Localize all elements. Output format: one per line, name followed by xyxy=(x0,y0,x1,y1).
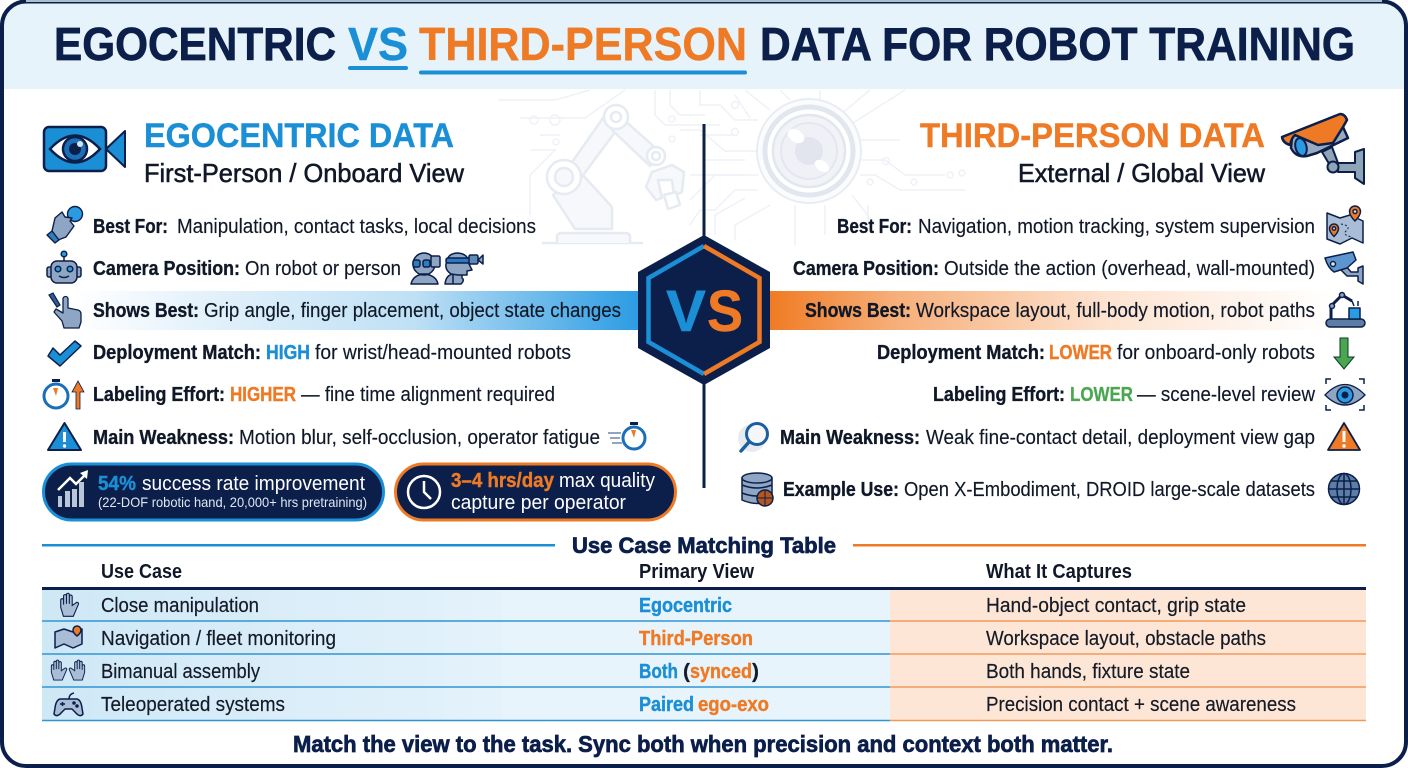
callout: success rate: 54% xyxy=(98,473,136,495)
callout: capture limit xyxy=(396,464,676,520)
table column headers: Use Case xyxy=(101,561,182,583)
row: camera position: Camera Position: xyxy=(93,258,240,280)
table row: teleoperated systems: ego-exo xyxy=(698,694,769,716)
callout: success rate: (22-DOF robotic hand, 20,000+ hrs pretraining) xyxy=(98,494,367,510)
icon: hand xyxy=(61,593,78,616)
table row: bimanual assembly xyxy=(51,660,1190,683)
icon: check mark xyxy=(48,341,81,366)
table row: bimanual assembly: Both xyxy=(639,661,678,683)
subheading: external view: External / Global View xyxy=(1018,158,1265,188)
table row: close manipulation xyxy=(61,593,1246,617)
table row: bimanual assembly: Bimanual assembly xyxy=(101,661,260,683)
VS hexagon badge: V xyxy=(666,279,706,344)
row: labeling effort: Labeling Effort: xyxy=(93,384,225,406)
table row: bimanual assembly: synced xyxy=(690,661,752,683)
row: labeling effort: — scene-level review xyxy=(1137,384,1316,406)
icon: globe xyxy=(1328,474,1360,504)
row: best for: Best For: xyxy=(837,216,912,238)
title: VS xyxy=(348,18,408,70)
row: labeling effort: Labeling Effort: xyxy=(933,384,1065,406)
row: main weakness xyxy=(48,422,645,450)
panel: egocentric header xyxy=(44,117,464,188)
row: shows best xyxy=(805,292,1365,327)
panel: third-person attributes xyxy=(738,206,1365,506)
title: THIRD-PERSON xyxy=(419,18,747,70)
row: main weakness: Motion blur, self-occlusion, operator fatigue xyxy=(239,427,600,449)
row: best for: Manipulation, contact tasks, local decisions xyxy=(177,216,536,238)
table row: teleoperated systems: Paired xyxy=(639,694,694,716)
panel: use case matching table xyxy=(42,533,1366,721)
row: example use: Example Use: xyxy=(783,479,899,501)
table row: navigation: Navigation / fleet monitoring xyxy=(101,628,336,650)
background: robot arm watermark xyxy=(498,90,750,243)
table row: close manipulation: Egocentric xyxy=(639,595,732,617)
row: deployment match xyxy=(48,341,571,366)
panel: third-person header xyxy=(920,114,1364,188)
row: best for xyxy=(47,206,536,243)
VS hexagon badge xyxy=(638,235,770,385)
table column headers xyxy=(101,561,1132,583)
center divider xyxy=(702,124,706,488)
icon: two hands xyxy=(51,660,85,680)
icon: robot head xyxy=(47,251,81,283)
row: deployment match: Deployment Match: xyxy=(877,342,1045,364)
icon: small wall camera xyxy=(1325,252,1363,284)
icon: down arrow xyxy=(1334,338,1354,369)
icon: game controller xyxy=(54,693,83,716)
callout: success rate: success rate improvement xyxy=(142,473,365,495)
row: main weakness xyxy=(738,423,1360,452)
background: camera lens watermark xyxy=(680,90,965,245)
row: deployment match xyxy=(877,338,1354,369)
row: labeling effort xyxy=(933,379,1365,410)
heading: egocentric data: EGOCENTRIC DATA xyxy=(144,117,454,155)
subheading: first-person view: First-Person / Onboard View xyxy=(144,158,464,188)
icon: head-mounted cameras xyxy=(411,253,483,284)
table row: bimanual assembly: ) xyxy=(752,661,759,683)
callout: capture limit: 3–4 hrs/day xyxy=(451,470,555,492)
row: example use xyxy=(742,473,1360,506)
row: shows best: Shows Best: xyxy=(805,300,911,322)
row: best for xyxy=(837,206,1363,244)
heading: third-person data: THIRD-PERSON DATA xyxy=(920,117,1265,155)
row: deployment match: for onboard-only robots xyxy=(1117,342,1315,364)
row: main weakness: Main Weakness: xyxy=(780,427,920,449)
table row: teleoperated systems: Teleoperated systems xyxy=(101,694,285,716)
table row: close manipulation: Hand-object contact, grip state xyxy=(986,595,1246,617)
title xyxy=(54,18,1355,74)
row: shows best xyxy=(49,293,621,328)
row: shows best: Workspace layout, full-body motion, robot paths xyxy=(916,300,1315,322)
row: shows best: Shows Best: xyxy=(93,300,199,322)
table row: bimanual assembly: Both hands, fixture state xyxy=(986,661,1190,683)
callout: capture limit: capture per operator xyxy=(451,492,626,514)
row: best for: Navigation, motion tracking, system supervision xyxy=(918,216,1315,238)
table row: navigation: Third-Person xyxy=(639,628,753,650)
row: main weakness: Main Weakness: xyxy=(93,427,234,449)
highlight bar: right xyxy=(768,291,1334,330)
table row: teleoperated systems xyxy=(54,693,1296,716)
row: camera position: Outside the action (overhead, wall-mounted) xyxy=(944,258,1315,280)
icon: growth chart xyxy=(58,470,88,507)
table column headers: What It Captures xyxy=(986,561,1132,583)
row: deployment match: LOWER xyxy=(1049,342,1112,364)
icon: warning triangle xyxy=(48,423,81,450)
VS hexagon badge: S xyxy=(707,279,743,344)
table row: navigation: Workspace layout, obstacle paths xyxy=(986,628,1266,650)
icon: warning triangle xyxy=(1328,423,1360,450)
table row: bimanual assembly: ( xyxy=(683,661,690,683)
row: example use: Open X-Embodiment, DROID large-scale datasets xyxy=(904,479,1315,501)
icon: clock xyxy=(408,476,440,508)
callout: capture limit: max quality xyxy=(559,470,655,492)
highlight bar: left xyxy=(75,291,641,330)
icon: eye video camera xyxy=(44,127,125,171)
row: deployment match: Deployment Match: xyxy=(93,342,261,364)
row: deployment match: for wrist/head-mounted robots xyxy=(315,342,571,364)
row: camera position: On robot or person xyxy=(245,258,401,280)
table row: teleoperated systems: Precision contact + scene awareness xyxy=(986,694,1296,716)
table row: navigation xyxy=(55,626,1266,650)
icon: stopwatch and up arrow xyxy=(44,379,84,409)
callout: success rate xyxy=(44,464,384,520)
title: EGOCENTRIC xyxy=(54,18,336,70)
title: DATA FOR ROBOT TRAINING xyxy=(760,18,1355,70)
icon: pointing hand xyxy=(49,293,81,328)
icon: eye in scan frame xyxy=(1325,379,1365,410)
row: labeling effort: LOWER xyxy=(1070,384,1133,406)
row: labeling effort: HIGHER xyxy=(230,384,296,406)
icon: blurred stopwatch xyxy=(608,422,645,449)
row: camera position xyxy=(47,251,483,284)
row: camera position xyxy=(793,252,1363,284)
row: shows best: Grip angle, finger placement, object state changes xyxy=(204,300,621,322)
icon: map xyxy=(55,626,82,648)
footer takeaway: Match the view to the task. Sync both when precision and context both matter. xyxy=(293,731,1113,757)
table backgrounds xyxy=(42,587,1366,721)
header band xyxy=(0,0,1408,89)
panel: egocentric attributes xyxy=(44,206,645,450)
table row: close manipulation: Close manipulation xyxy=(101,595,259,617)
icon: conveyor robot xyxy=(1326,292,1365,327)
icon: security camera xyxy=(1282,114,1364,184)
icon: magnifier xyxy=(738,424,768,452)
row: camera position: Camera Position: xyxy=(793,258,939,280)
icon: robot hand xyxy=(47,206,82,243)
icon: map with pin xyxy=(1327,206,1363,244)
row: main weakness: Weak fine-contact detail, deployment view gap xyxy=(926,427,1315,449)
table title: Use Case Matching Table xyxy=(572,533,836,558)
row: labeling effort xyxy=(44,379,555,409)
row: deployment match: HIGH xyxy=(266,342,310,364)
table column headers: Primary View xyxy=(639,561,754,583)
icon: database and globe xyxy=(742,473,773,506)
row: best for: Best For: xyxy=(93,216,168,238)
row: labeling effort: — fine time alignment required xyxy=(301,384,555,406)
